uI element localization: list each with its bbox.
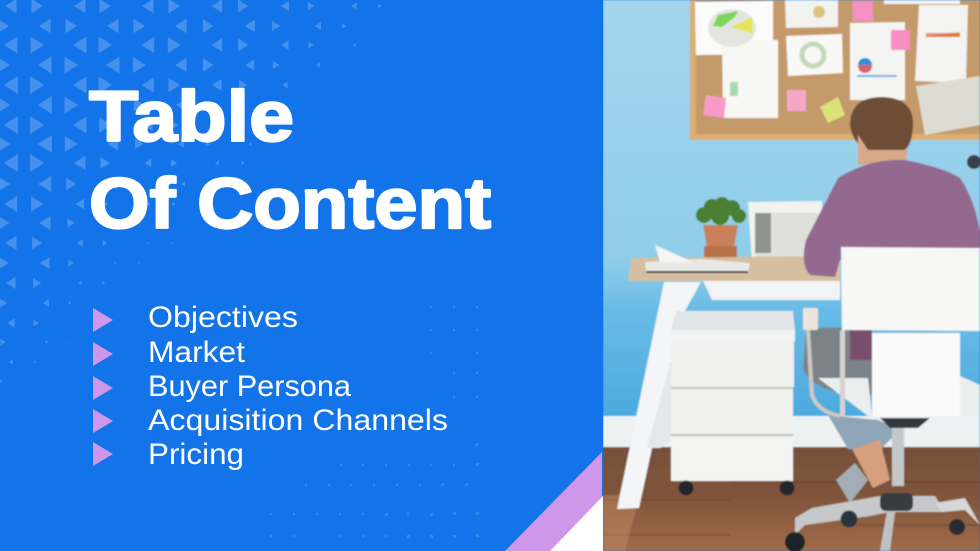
plant	[696, 197, 746, 261]
man	[803, 97, 980, 503]
laptop	[747, 200, 823, 258]
chart papers	[695, 0, 980, 135]
list items: Buyer Persona	[148, 370, 352, 403]
office chair	[785, 247, 980, 551]
wall lamp	[967, 155, 980, 169]
photo: man working at desk	[603, 0, 980, 551]
notebook	[645, 245, 750, 273]
corner accent	[505, 452, 603, 551]
contents list	[93, 301, 448, 471]
sticky notes	[703, 1, 910, 123]
list items	[148, 301, 448, 471]
wall	[603, 0, 980, 420]
title: Of Content	[89, 165, 491, 244]
floor	[603, 447, 980, 551]
list items: Pricing	[148, 438, 244, 471]
baseboard	[603, 416, 980, 448]
drawer cabinet	[671, 311, 795, 496]
list items: Objectives	[148, 301, 298, 334]
list items: Market	[148, 336, 245, 369]
panel: blue background	[0, 0, 603, 551]
icon: bullet triangles	[93, 308, 113, 466]
title	[89, 78, 491, 244]
list items: Acquisition Channels	[148, 404, 448, 437]
corkboard	[690, 0, 980, 140]
title: Table	[89, 78, 294, 157]
desk	[617, 256, 840, 509]
